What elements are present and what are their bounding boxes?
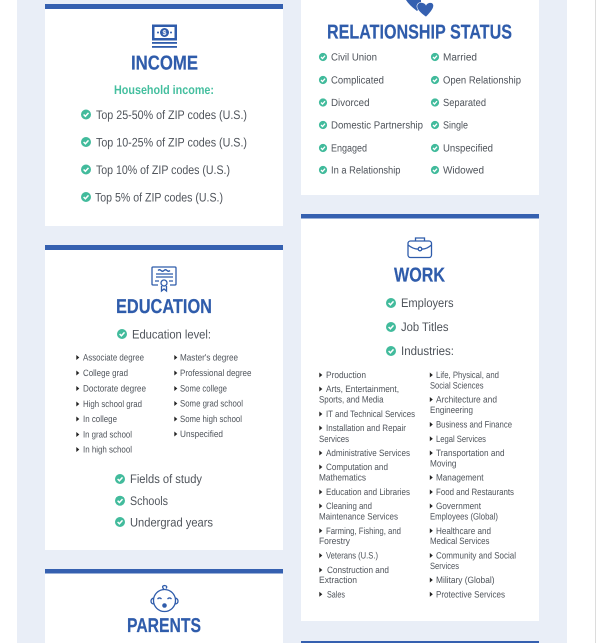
- panel: relationship status: [301, 0, 539, 195]
- list: industries left: Forestry: [319, 536, 350, 546]
- icon: baby face: [151, 586, 178, 612]
- list: statuses left: Complicated: [331, 76, 384, 87]
- list: industries right: Life, Physical, and: [436, 370, 499, 380]
- list: industries left: [319, 370, 415, 600]
- list: work options: [386, 296, 454, 358]
- list: statuses left: Engaged: [331, 144, 367, 155]
- list: industries left: Construction and: [327, 565, 389, 575]
- list: income levels: Top 25-50% of ZIP codes (U.S.): [96, 108, 247, 122]
- list: industries right: Legal Services: [436, 434, 486, 444]
- list: work options: Industries:: [401, 344, 454, 358]
- list: education levels left: Doctorate degree: [83, 384, 146, 394]
- list: statuses left: Divorced: [331, 98, 370, 109]
- list: industries left: Cleaning and: [326, 501, 372, 511]
- list: industries left: Installation and Repair: [326, 423, 406, 433]
- list: education levels left: In high school: [83, 445, 132, 455]
- list: education levels right: Some high school: [180, 414, 242, 424]
- list: statuses left: Domestic Partnership: [331, 121, 423, 132]
- list: industries right: Community and Social: [436, 551, 516, 561]
- list: industries right: Social Sciences: [430, 381, 484, 391]
- list: statuses right: Single: [443, 121, 468, 132]
- list: education levels right: Unspecified: [180, 429, 223, 439]
- icon: banknotes: [152, 24, 177, 48]
- list: industries right: Moving: [430, 459, 456, 469]
- list: statuses right: Separated: [443, 98, 486, 109]
- list: industries right: Services: [430, 561, 459, 571]
- list: industries right: Business and Finance: [436, 420, 512, 430]
- list: education levels left: In college: [83, 414, 117, 424]
- list: work options: Employers: [401, 296, 454, 310]
- list: industries right: Engineering: [430, 405, 473, 415]
- list: industries right: Protective Services: [436, 590, 505, 600]
- list: industries left: Sports, and Media: [319, 395, 384, 405]
- list: education levels right: Professional degree: [180, 368, 252, 378]
- list: industries right: Architecture and: [436, 395, 497, 405]
- list: statuses right: Unspecified: [443, 144, 493, 155]
- list: industries left: Mathematics: [319, 473, 366, 483]
- list: industries left: Maintenance Services: [319, 512, 398, 522]
- panel: income: [45, 4, 283, 226]
- list: statuses right: Married: [443, 53, 477, 64]
- list: industries right: Management: [436, 473, 484, 483]
- panel: education: [45, 245, 283, 550]
- icon: briefcase: [408, 238, 432, 258]
- list: statuses right: Open Relationship: [443, 76, 521, 87]
- list: education levels right: Some grad school: [180, 399, 243, 409]
- list: industries left: Services: [319, 434, 349, 444]
- list: statuses left: Civil Union: [331, 53, 377, 64]
- list: education levels left: Associate degree: [83, 353, 144, 363]
- list: income levels: Top 10-25% of ZIP codes (U.S.): [96, 136, 247, 150]
- heading: income: INCOME: [131, 52, 198, 74]
- icon: banknotes: $: [163, 29, 167, 37]
- right page edge line: [595, 0, 596, 643]
- list: industries right: [430, 370, 516, 600]
- list: statuses right: Widowed: [443, 166, 484, 177]
- list: industries right: Military (Global): [436, 575, 494, 585]
- list: industries right: Healthcare and: [436, 526, 491, 536]
- list: other education options: Schools: [130, 494, 168, 508]
- list: industries left: Education and Libraries: [326, 487, 410, 497]
- heading: parents: PARENTS: [127, 615, 201, 637]
- heading: relationship status: RELATIONSHIP STATUS: [327, 22, 512, 44]
- panel: work: [301, 214, 539, 621]
- list: industries left: Arts, Entertainment,: [326, 384, 399, 394]
- list: education levels left: High school grad: [83, 399, 142, 409]
- list: statuses right: [431, 53, 521, 177]
- list: industries left: IT and Technical Services: [326, 409, 415, 419]
- list: industries right: Transportation and: [436, 448, 504, 458]
- list: education levels left: In grad school: [83, 430, 132, 440]
- panel: parents: [45, 569, 283, 643]
- list: income levels: Top 10% of ZIP codes (U.S.): [96, 163, 230, 177]
- list: industries left: Extraction: [319, 575, 357, 585]
- list: industries right: Employees (Global): [430, 512, 498, 522]
- heading: education: EDUCATION: [116, 296, 212, 318]
- list: education levels left: [76, 353, 146, 455]
- list: education levels right: Master's degree: [180, 353, 238, 363]
- list: industries right: Government: [436, 501, 481, 511]
- list: other education options: Fields of study: [130, 472, 203, 486]
- list: other education options: [115, 472, 213, 529]
- list: industries right: Medical Services: [430, 536, 490, 546]
- list: statuses left: In a Relationship: [331, 166, 401, 177]
- list: work options: Job Titles: [401, 320, 448, 334]
- list: industries left: Production: [326, 370, 366, 380]
- list: other education options: Undergrad years: [130, 515, 213, 529]
- list: education levels right: Some college: [180, 384, 227, 394]
- subheading: household income: Household income:: [114, 83, 214, 97]
- icon: hearts: [406, 0, 434, 17]
- list: income levels: [81, 108, 247, 204]
- icon: diploma: [152, 267, 176, 291]
- list: industries left: Sales: [327, 590, 345, 600]
- list: industries left: Computation and: [326, 462, 388, 472]
- list: industries left: Veterans (U.S.): [326, 551, 378, 561]
- list: industries right: Food and Restaurants: [436, 487, 514, 497]
- heading: work: WORK: [394, 264, 445, 286]
- education level label: Education level:: [132, 327, 211, 341]
- list: income levels: Top 5% of ZIP codes (U.S.): [95, 190, 223, 204]
- list: industries left: Farming, Fishing, and: [326, 526, 401, 536]
- list: education levels left: College grad: [83, 368, 128, 378]
- panel: next section top edge: [301, 641, 539, 643]
- list: education levels right: [174, 353, 252, 439]
- list: industries left: Administrative Services: [326, 448, 410, 458]
- list: statuses left: [319, 53, 423, 177]
